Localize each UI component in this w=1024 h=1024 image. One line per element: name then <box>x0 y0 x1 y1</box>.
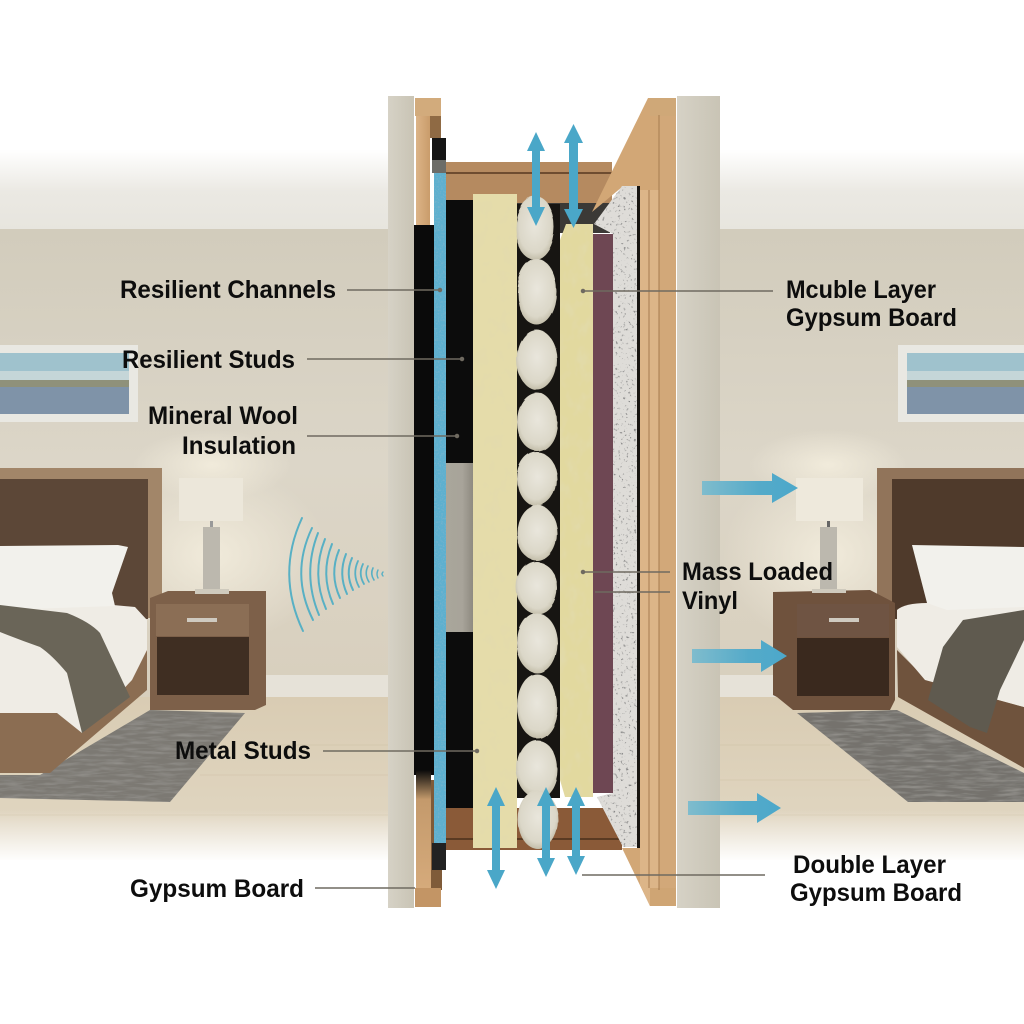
pillow <box>912 545 1024 610</box>
label: mineral wool insulation <box>148 402 298 460</box>
rug <box>0 710 245 802</box>
label: resilient channels: Resilient Channels <box>120 276 336 304</box>
label: mcuble layer gypsum board: Gypsum Board <box>786 304 957 332</box>
headboard <box>0 468 162 619</box>
label: mass loaded vinyl <box>682 558 833 615</box>
left lamp <box>179 478 243 594</box>
label: mineral wool insulation: Insulation <box>182 432 296 460</box>
dark cavity <box>446 200 473 810</box>
mass loaded vinyl <box>593 234 613 793</box>
mineral wool batt left <box>473 194 517 848</box>
right lamp <box>796 478 863 593</box>
vertical sound arrows <box>487 124 585 889</box>
mineral wool batt right <box>560 224 593 797</box>
label: double layer gypsum board: Gypsum Board <box>790 879 962 907</box>
bed base <box>0 650 147 773</box>
mattress <box>0 605 147 733</box>
insulation balls <box>515 196 558 849</box>
right bed <box>797 468 1024 802</box>
wall cross-section <box>388 96 720 908</box>
sound waves icon <box>289 518 383 631</box>
label: double layer gypsum board <box>790 851 962 907</box>
left bed <box>0 468 245 802</box>
pillow <box>0 545 128 610</box>
horizontal transmission arrows <box>688 473 798 823</box>
leader lines <box>307 288 773 888</box>
label: mass loaded vinyl: Vinyl <box>682 587 738 615</box>
label: gypsum board: Gypsum Board <box>130 875 304 903</box>
label: mass loaded vinyl: Mass Loaded <box>682 558 833 586</box>
headboard <box>877 468 1024 619</box>
label: metal studs: Metal Studs <box>175 737 311 765</box>
mattress <box>897 603 1024 707</box>
right wood frame with diagonal <box>592 98 676 906</box>
label: mineral wool insulation: Mineral Wool <box>148 402 298 430</box>
balls cavity <box>517 204 560 798</box>
blue resilient channel <box>434 173 446 843</box>
label: resilient studs: Resilient Studs <box>122 346 295 374</box>
label: mcuble layer gypsum board <box>786 276 957 332</box>
label: mcuble layer gypsum board: Mcuble Layer <box>786 276 936 304</box>
floor fade to white <box>0 810 1024 862</box>
left nightstand <box>150 591 266 710</box>
bed base <box>897 650 1024 768</box>
right nightstand <box>773 590 895 710</box>
left wall painting <box>0 345 138 422</box>
rug <box>797 710 1024 802</box>
left gypsum board <box>388 96 414 908</box>
label: double layer gypsum board: Double Layer <box>793 851 946 879</box>
blanket <box>0 605 130 733</box>
left wood stud <box>414 98 442 907</box>
metal stud <box>446 463 473 632</box>
speckled foam board <box>594 186 637 847</box>
top wood frame <box>446 162 612 233</box>
right gypsum board <box>677 96 720 908</box>
left room background <box>0 130 388 860</box>
resilient channel black clips <box>432 138 446 870</box>
blanket <box>928 610 1024 733</box>
right room background <box>720 130 1024 860</box>
bottom wood frame <box>446 808 622 850</box>
right wall painting <box>898 345 1024 422</box>
